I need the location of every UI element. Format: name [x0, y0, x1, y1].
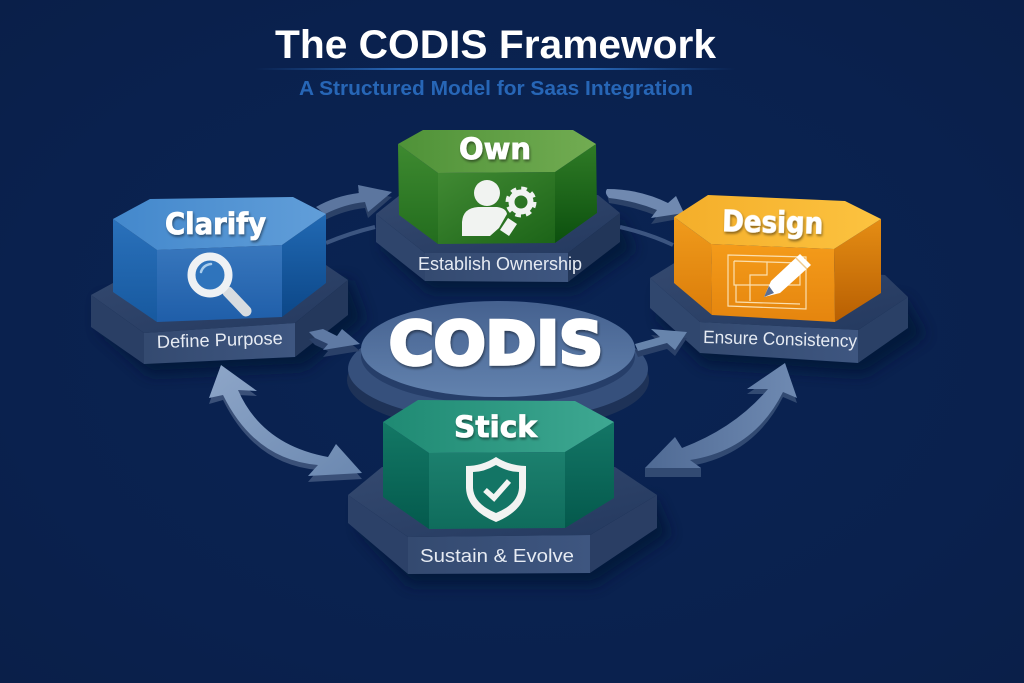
heading: Clarify: Clarify	[165, 207, 266, 241]
heading: Design: Design	[722, 204, 824, 241]
platform: Stick	[348, 467, 657, 574]
block: Design	[674, 195, 881, 322]
platform: Own	[376, 195, 620, 282]
platform: Clarify	[91, 263, 348, 364]
panel: Own step	[376, 130, 620, 282]
arrow: Design and Stick double-headed	[645, 363, 797, 477]
label: Ensure Consistency: Ensure Consistency	[703, 327, 857, 351]
heading: Own: Own	[459, 132, 531, 166]
icon: shield with check	[466, 457, 526, 522]
arrow: Clarify and Stick double-headed	[209, 365, 362, 482]
heading: CODIS: CODIS	[389, 309, 603, 379]
arrow: Clarify to CODIS	[309, 329, 360, 357]
platform: Design	[650, 262, 908, 363]
shadows under platforms	[100, 220, 925, 585]
faint orbit ring left	[326, 227, 375, 243]
block: Clarify	[113, 197, 326, 322]
block: Stick	[383, 400, 614, 529]
faint orbit ring right	[620, 227, 673, 245]
label: Sustain & Evolve: Sustain & Evolve	[420, 546, 574, 566]
panel: Clarify step	[91, 197, 348, 364]
label: Define Purpose: Define Purpose	[156, 328, 283, 352]
label: Establish Ownership: Establish Ownership	[418, 254, 582, 274]
block: Own	[398, 130, 597, 244]
panel: Design step	[650, 195, 908, 363]
panel: Stick step	[348, 400, 657, 574]
arrow: CODIS to Design	[635, 329, 687, 357]
arrow: Own to Design	[606, 189, 684, 224]
heading: Stick: Stick	[454, 410, 538, 444]
icon: blueprint and pencil	[728, 254, 811, 309]
central CODIS hub	[347, 301, 649, 432]
subtitle: A Structured Model for Saas Integration	[299, 78, 693, 100]
title: The CODIS Framework	[275, 23, 717, 67]
arrow: Clarify to Own	[316, 185, 392, 220]
icon: person with gear	[462, 180, 534, 236]
icon: magnifying glass	[192, 256, 246, 311]
